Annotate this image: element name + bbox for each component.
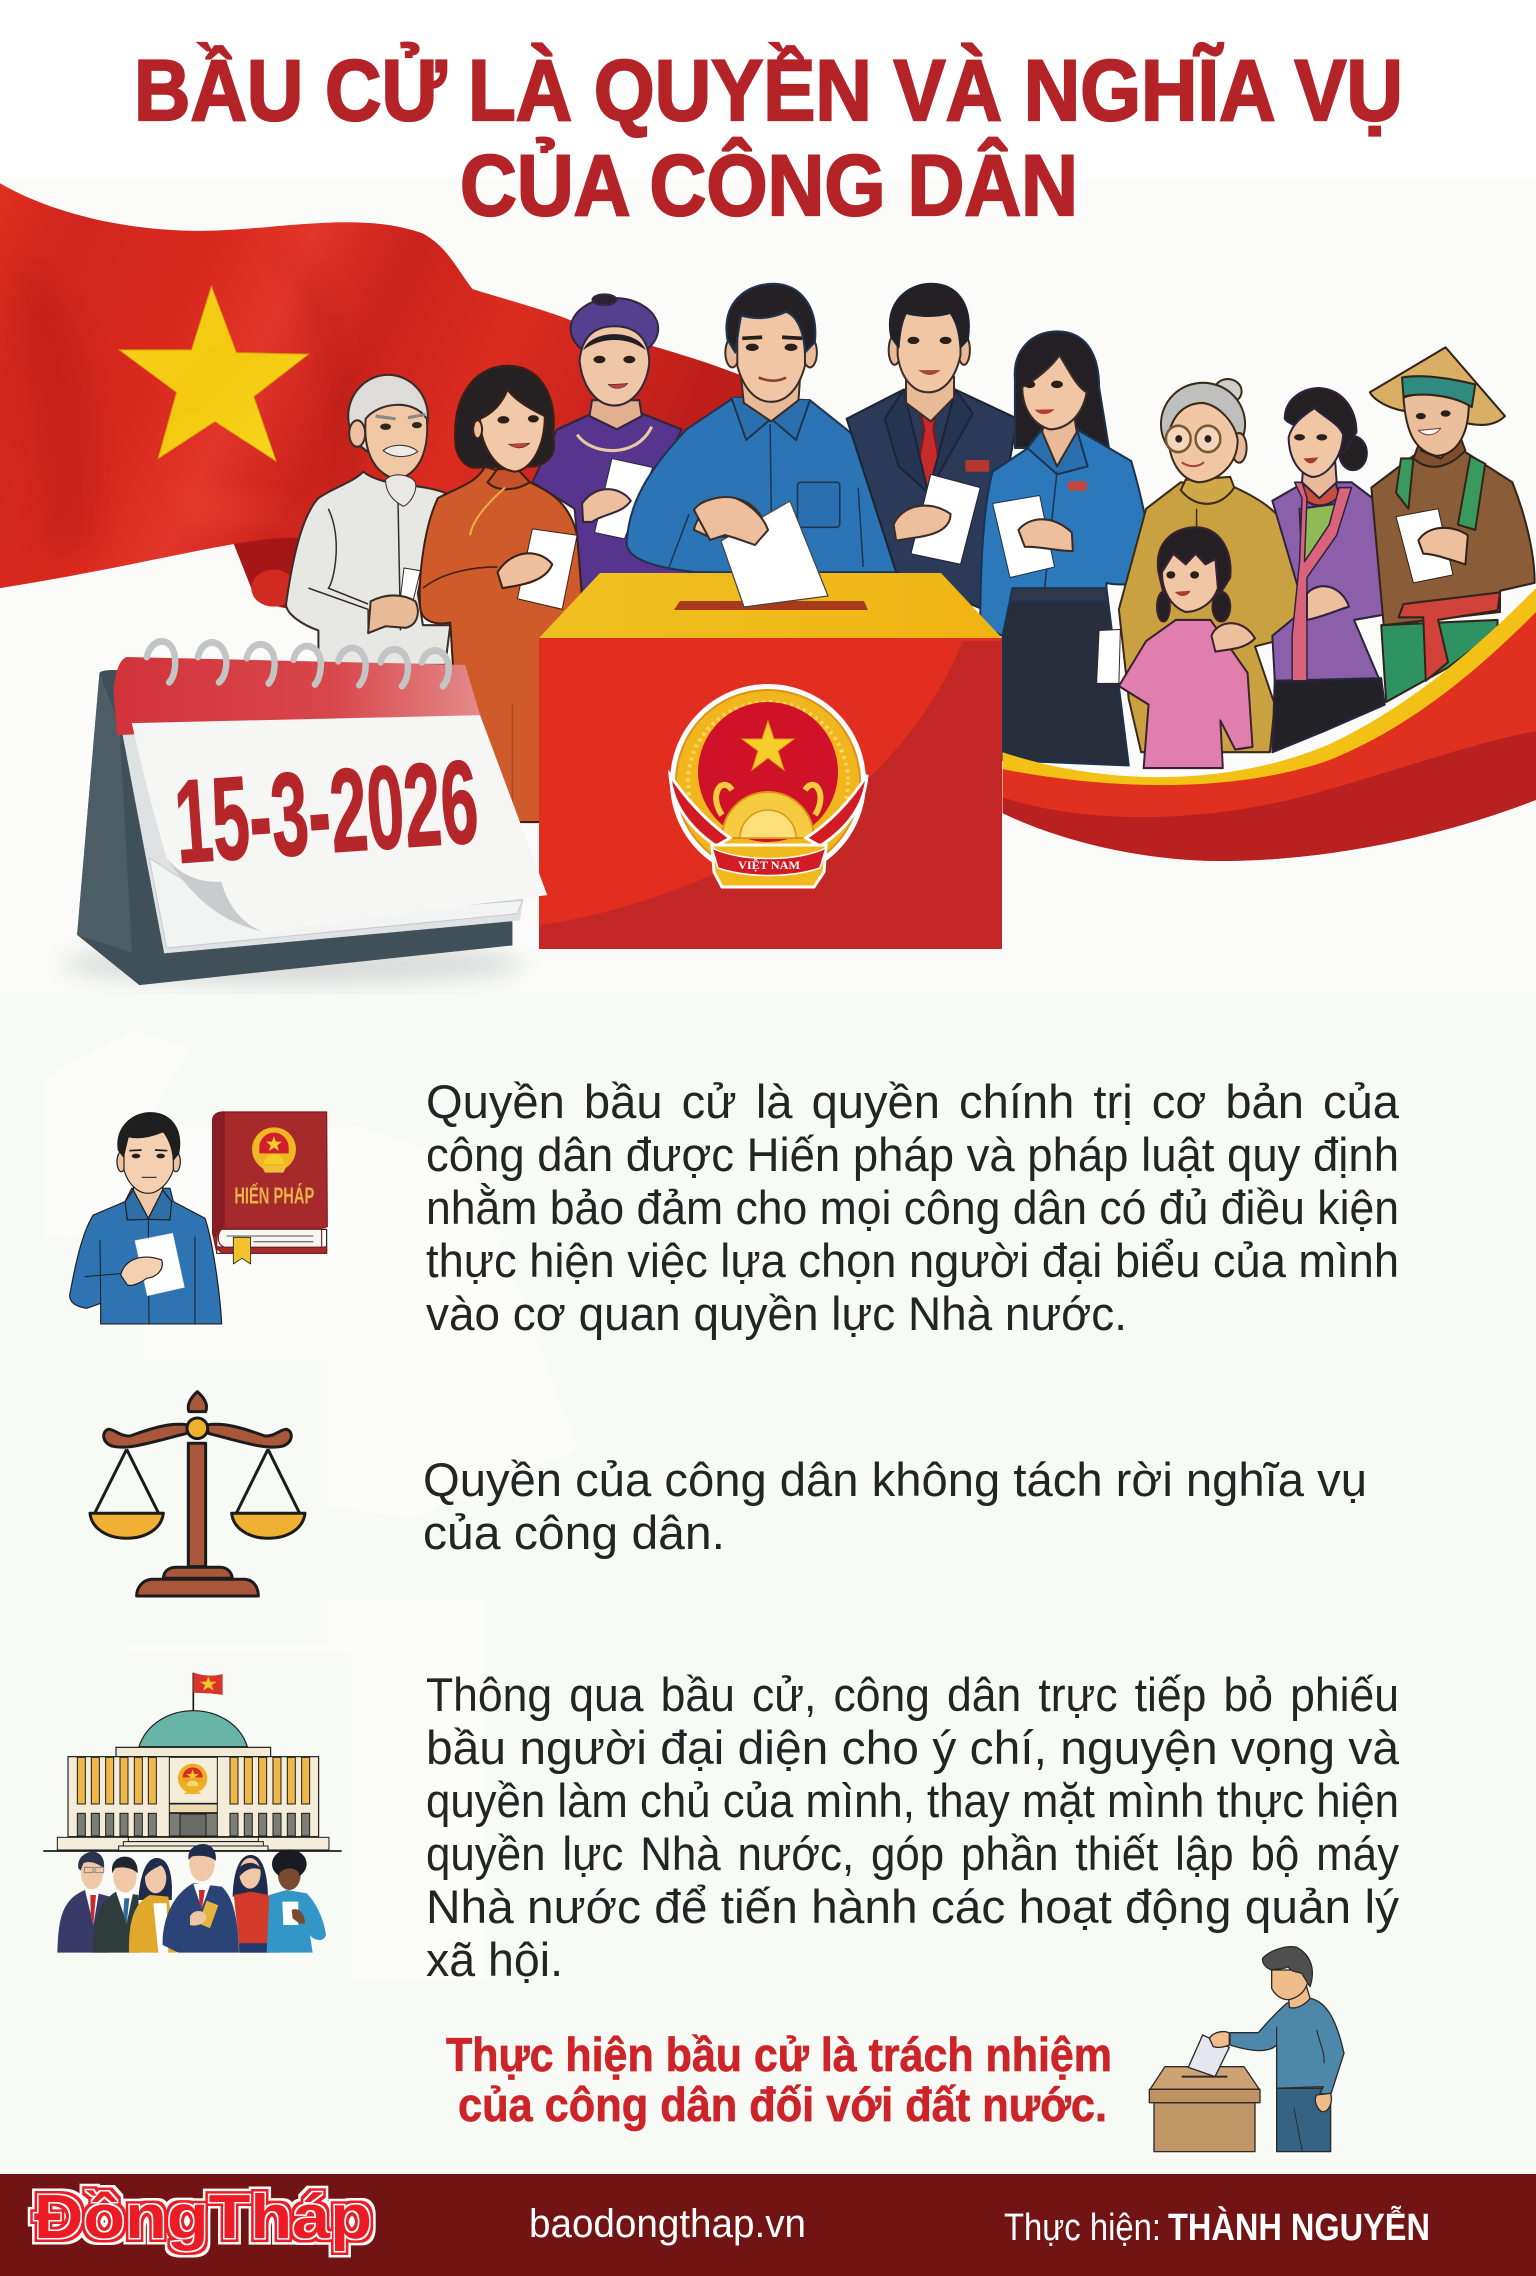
line: vào cơ quan quyền lực Nhà nước. xyxy=(426,1287,1127,1340)
line: Quyền của công dân không tách rời nghĩa vụ xyxy=(423,1453,1367,1506)
red and yellow swoosh ribbon xyxy=(1003,588,1536,861)
legs xyxy=(1277,2088,1331,2152)
ribbon yellow edge xyxy=(1003,588,1536,785)
box lid xyxy=(539,573,1002,638)
ground line xyxy=(43,1848,342,1853)
title line 1: BẦU CỬ LÀ QUYỀN VÀ NGHĨA VỤ xyxy=(134,43,1403,139)
box slot xyxy=(674,601,868,610)
line: Thực hiện bầu cử là trách nhiệm xyxy=(446,2028,1112,2081)
line: của công dân. xyxy=(423,1506,725,1559)
credit name: THÀNH NGUYỄN xyxy=(1168,2205,1430,2249)
box front shading xyxy=(539,641,1002,949)
ballot box xyxy=(539,497,1002,949)
line: quyền làm chủ của mình, thay mặt mình thực hiện xyxy=(426,1774,1399,1827)
man head xyxy=(117,1113,180,1193)
line: Quyền bầu cử là quyền chính trị cơ bản của xyxy=(426,1075,1400,1128)
panel: paragraph 2 xyxy=(90,1392,1367,1596)
callout text xyxy=(446,2028,1112,2131)
line: bầu người đại diện cho ý chí, nguyện vọng và xyxy=(426,1721,1400,1774)
person: farmer with conical hat xyxy=(1370,347,1535,702)
person: man in dark suit xyxy=(847,284,1017,609)
icon: citizen holding ballot beside constitution book xyxy=(70,1112,327,1324)
calendar binding rings xyxy=(147,641,449,686)
calendar page with curl xyxy=(132,715,547,932)
logo: Dong Thap: ĐồngTháp xyxy=(34,2183,372,2252)
website: baodongthap.vn xyxy=(529,2202,806,2246)
person: little girl in pink xyxy=(1097,527,1255,768)
footer bar xyxy=(0,2174,1536,2276)
dome xyxy=(139,1711,247,1747)
flag fold shading xyxy=(20,249,364,562)
box front xyxy=(539,638,1002,949)
sweater xyxy=(1230,1998,1344,2095)
book body xyxy=(213,1112,327,1264)
title band background xyxy=(0,0,1536,178)
ribbon dark shade xyxy=(1003,731,1536,861)
icon: voter casting ballot xyxy=(1149,1947,1344,2152)
line: công dân được Hiến pháp và pháp luật quy định xyxy=(426,1128,1399,1181)
hair xyxy=(1263,1947,1312,1987)
subtle white background patches xyxy=(44,1031,578,1980)
callout: duty to vote xyxy=(446,1947,1344,2152)
man shirt xyxy=(70,1188,222,1324)
emblem label: VIỆT NAM xyxy=(738,858,800,872)
delegates group xyxy=(57,1844,326,1953)
line: của công dân đối với đất nước. xyxy=(458,2078,1107,2131)
neck xyxy=(1288,1987,1310,2008)
icon: yellow star xyxy=(119,286,308,461)
book title: HIẾN PHÁP xyxy=(234,1182,314,1208)
head xyxy=(1272,1970,1308,2000)
flag xyxy=(193,1673,223,1711)
person: woman in orange ao dai xyxy=(420,366,582,822)
flag cloth xyxy=(0,183,756,588)
calendar page stack xyxy=(122,720,523,953)
panel: paragraph 1 xyxy=(70,1075,1400,1340)
person: young man in blue shirt voting xyxy=(627,284,897,572)
panel: paragraph 3 xyxy=(43,1668,1400,1986)
person: old woman in mustard jacket xyxy=(1119,379,1303,752)
slot xyxy=(1182,2074,1227,2080)
ballot paper xyxy=(135,1233,184,1296)
steps xyxy=(57,1837,329,1851)
text: paragraph 1 xyxy=(426,1075,1400,1340)
credit label: Thực hiện: xyxy=(1004,2207,1161,2249)
person: woman in purple blouse xyxy=(1272,388,1414,752)
ballot xyxy=(1188,2035,1229,2077)
ballot paper entering slot xyxy=(721,501,828,607)
title xyxy=(134,43,1403,234)
person: young woman in blue shirt xyxy=(980,331,1154,765)
wooden box xyxy=(1149,2067,1260,2152)
person: elder man xyxy=(286,375,450,665)
line: Nhà nước để tiến hành các hoạt động quản lý xyxy=(426,1880,1400,1933)
hero background xyxy=(0,178,1536,992)
calendar shadow xyxy=(60,943,527,985)
calendar date: 15-3-2026 xyxy=(171,736,482,889)
text: paragraph 2 xyxy=(423,1453,1367,1559)
building xyxy=(57,1747,329,1851)
credit xyxy=(1004,2205,1430,2249)
title line 2: CỦA CÔNG DÂN xyxy=(460,138,1078,234)
line: quyền lực Nhà nước, góp phần thiết lập bộ máy xyxy=(426,1827,1399,1880)
calendar red header xyxy=(113,657,480,735)
man neck xyxy=(133,1180,163,1218)
desk calendar xyxy=(60,641,547,985)
line: xã hội. xyxy=(426,1933,563,1986)
flag back fold xyxy=(231,533,303,609)
text: paragraph 3 xyxy=(426,1668,1400,1986)
line: Thông qua bầu cử, công dân trực tiếp bỏ phiếu xyxy=(426,1668,1399,1721)
panel: hero illustration xyxy=(0,178,1536,992)
ribbon red xyxy=(1003,609,1536,861)
book emblem xyxy=(252,1127,296,1173)
emblem of Vietnam xyxy=(670,684,867,887)
hand on ballot xyxy=(694,497,768,545)
hand xyxy=(1209,2032,1229,2047)
line: thực hiện việc lựa chọn người đại biểu của mình xyxy=(426,1234,1399,1287)
calendar artwork xyxy=(60,641,547,985)
calendar stand xyxy=(77,670,512,985)
icon: national assembly building with delegates xyxy=(43,1673,342,1953)
line: nhằm bảo đảm cho mọi công dân có đủ điều kiện xyxy=(426,1181,1399,1234)
person: woman in purple turban xyxy=(532,294,696,593)
hand xyxy=(121,1257,162,1285)
icon: scales of justice xyxy=(90,1392,305,1596)
flag xyxy=(0,183,756,609)
footer background xyxy=(0,2174,1536,2276)
building emblem xyxy=(178,1764,207,1794)
